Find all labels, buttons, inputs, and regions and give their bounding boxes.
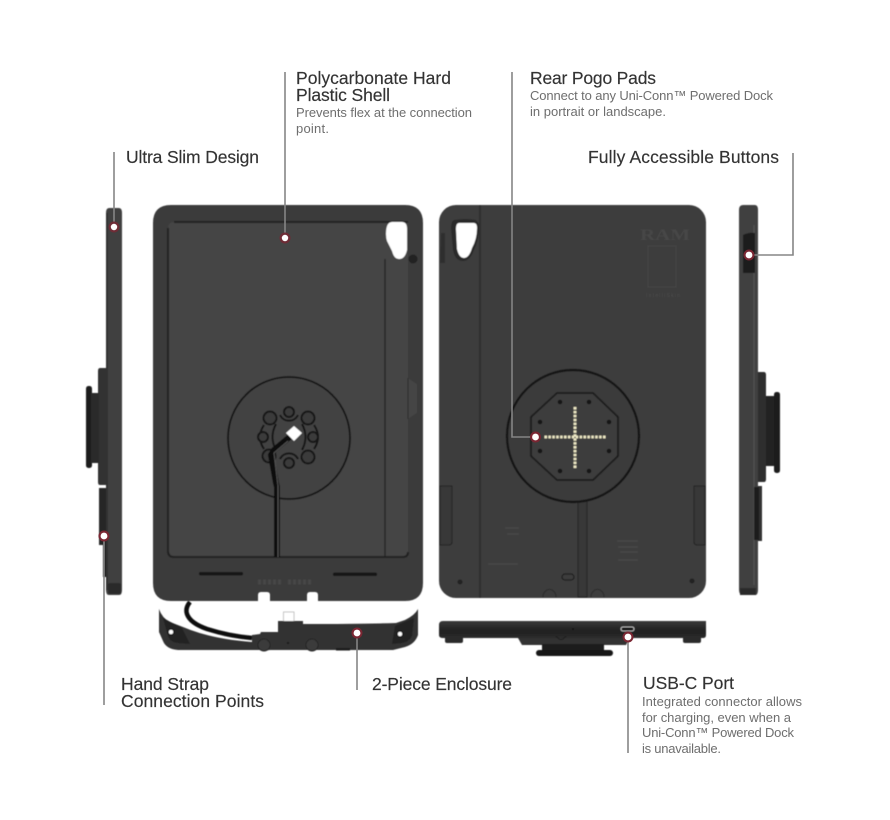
leader line: fully accessible buttons (752, 153, 793, 255)
label: rear pogo pads: Connect to any Uni-Conn™ Powered Dock (530, 88, 774, 103)
mount circle and rosette (228, 377, 350, 499)
label: rear pogo pads: in portrait or landscape. (530, 104, 666, 119)
front view: case interior (153, 205, 423, 601)
RAM logo: RAM (640, 227, 690, 244)
marker: rear pogo pads (530, 432, 541, 442)
label: rear pogo pads: Rear Pogo Pads (530, 68, 656, 88)
label: USB-C port: Uni-Conn™ Powered Dock (642, 725, 794, 740)
leader line: hand strap connection points (103, 536, 105, 705)
marker: fully accessible buttons (744, 250, 754, 260)
lower tabs and channel (440, 486, 452, 545)
label: USB-C port: Integrated connector allows (642, 694, 802, 709)
right side view of case (739, 205, 780, 595)
bottom enclosure piece with USB-C cable (159, 602, 418, 651)
label: USB-C port (642, 673, 802, 756)
label: hand strap connection points: Hand Strap (121, 674, 209, 694)
label: rear pogo pads (530, 68, 774, 119)
bottom edge view with USB-C port (439, 621, 706, 656)
leader line: polycarbonate shell (284, 72, 286, 238)
marker: hand strap points (98, 530, 110, 542)
marker: ultra slim design (108, 222, 120, 232)
rear view of case (439, 205, 706, 598)
camera opening (451, 219, 479, 261)
label: USB-C port: is unavailable. (642, 741, 721, 756)
rear screws and small details (458, 578, 694, 584)
mount ring (507, 370, 639, 502)
label: polycarbonate hard plastic shell: Plastic Shell (296, 85, 390, 105)
label: fully accessible buttons: Fully Accessible Buttons (588, 147, 779, 167)
leader line: 2-piece enclosure (356, 633, 358, 690)
side button slot (743, 233, 755, 273)
label: polycarbonate hard plastic shell: Prevents flex at the connection (296, 105, 472, 120)
leader line: rear pogo pads (512, 72, 532, 437)
marker: 2-piece enclosure (352, 628, 362, 638)
label: polycarbonate hard plastic shell (296, 68, 472, 136)
marker: polycarbonate shell (280, 232, 290, 244)
label: 2-piece enclosure: 2-Piece Enclosure (372, 674, 512, 694)
pogo plate (531, 393, 618, 480)
cable and connector (271, 435, 292, 557)
leader line: USB-C port (627, 637, 629, 753)
marker: USB-C port (622, 632, 634, 642)
label: USB-C port: for charging, even when a (642, 710, 792, 725)
label: polycarbonate hard plastic shell: Polycarbonate Hard (296, 68, 451, 88)
label: polycarbonate hard plastic shell: point. (296, 121, 329, 136)
label: ultra slim design: Ultra Slim Design (126, 147, 259, 167)
label: USB-C port: USB-C Port (643, 673, 734, 693)
camera cutout (386, 222, 407, 259)
left side view of case (86, 208, 122, 595)
leader line: ultra slim design (113, 152, 115, 227)
rear view of case: IntelliSkin (646, 293, 680, 299)
pogo pad contacts (544, 407, 606, 468)
label: hand strap connection points (121, 674, 264, 711)
label: hand strap connection points: Connection Points (121, 691, 264, 711)
